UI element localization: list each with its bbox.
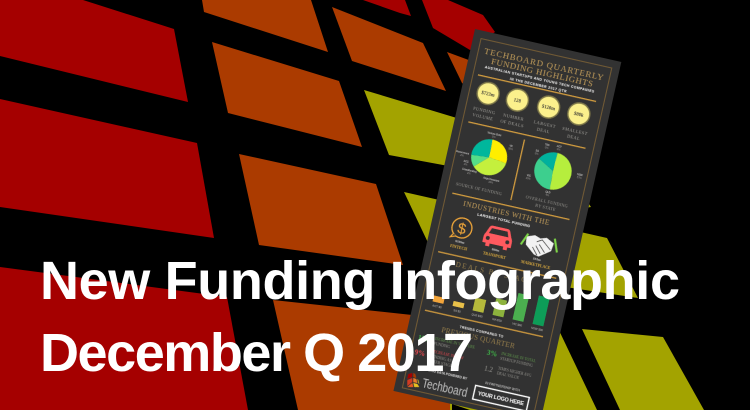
stat: largest deal <box>532 94 562 135</box>
stat: smallest deal: $80k <box>573 112 584 119</box>
trend: new funding: FUNDING AS <box>430 354 452 363</box>
stat: smallest deal <box>560 100 594 143</box>
pie caption: funding by state <box>524 194 568 215</box>
trend: total startup funding: INCREASE IN TOTAL <box>501 352 537 364</box>
industry label: fintech: FINTECH <box>450 244 467 252</box>
industry label: marketplace: $55m <box>533 256 541 262</box>
pie labels: source of funding: Angel Investors <box>483 176 500 183</box>
bar labels: NSW $90 <box>531 326 544 332</box>
title: December Q 2017 <box>40 323 473 383</box>
icon: car <box>482 224 515 251</box>
stat: smallest deal: DEAL <box>567 133 581 141</box>
stat: number of deals: NUMBER <box>503 112 524 122</box>
stat: largest deal: $120m <box>541 105 555 112</box>
pie labels: funding by state: SA <box>535 149 539 153</box>
poster inner border <box>402 39 612 410</box>
stat: funding volume: $723m <box>481 91 495 99</box>
pie labels: funding by state: 0% <box>545 146 549 150</box>
panel: orange grid tiles <box>202 0 485 410</box>
stat: funding volume: VOLUME <box>472 112 494 122</box>
pie labels: funding by state: ACT <box>556 145 562 149</box>
panel: olive grid tiles <box>364 90 704 410</box>
industry label: fintech: $339m <box>455 239 465 245</box>
industry label: fintech <box>450 238 469 252</box>
poster subtitle: IN THE DECEMBER 2017 QTR <box>509 77 567 94</box>
heading: deals by stage: DEALS BY STAGE <box>455 261 533 286</box>
stat: largest deal: LARGEST <box>533 119 556 129</box>
stat: funding volume <box>471 80 502 122</box>
logo placeholder box: YOUR LOGO HERE <box>477 391 525 407</box>
industry label: marketplace: MARKETPLACE <box>521 260 551 270</box>
pie labels: funding by state: 4% <box>545 194 550 197</box>
title <box>40 251 680 383</box>
icon: techboard logo <box>407 373 419 387</box>
divider <box>468 121 586 149</box>
heading: previous quarter: PREVIOUS QUARTER <box>441 325 516 350</box>
pie labels: funding by state: TAS <box>545 143 550 147</box>
pie chart: funding by state <box>534 152 572 190</box>
poster title: TECHBOARD QUARTERLY <box>483 46 605 82</box>
subheading: trends compared to: TRENDS COMPARED TO <box>459 325 504 339</box>
logo text: techboard: Techboard <box>421 376 469 400</box>
pie labels: source of funding: 34% <box>488 181 494 185</box>
poster title: FUNDING HIGHLIGHTS <box>490 56 594 89</box>
bar labels: ACT $0 <box>432 303 443 310</box>
credit: funding data powered by: FUNDING DATA POWERED BY <box>421 367 468 381</box>
trend: total startup funding: STARTUP FUNDING <box>500 357 533 368</box>
pie labels: source of funding: ACC <box>463 160 469 164</box>
credit: in partnership with: IN PARTNERSHIP WITH <box>485 381 521 393</box>
pie labels: funding by state: 30% <box>525 177 532 181</box>
bar labels: QLD $30 <box>471 312 483 319</box>
pie caption: funding by state: BY STATE <box>535 203 556 212</box>
pie chart: source of funding <box>471 139 507 175</box>
industry label: transport <box>482 245 508 260</box>
bar labels <box>432 303 544 332</box>
pie caption: funding by state: OVERALL FUNDING <box>525 194 568 209</box>
trend: venture funding: INCREASE IN VENTURE <box>434 337 476 350</box>
pie labels: source of funding: 2% <box>460 154 465 158</box>
trend: new funding <box>413 346 464 370</box>
poster subtitle: AUSTRALIAN STARTUPS AND YOUNG TECH COMPANIES <box>484 65 595 94</box>
stat: number of deals: OF DEALS <box>500 118 525 129</box>
trend: new funding: 9% <box>414 348 426 358</box>
subheading: largest total funding: LARGEST TOTAL FUNDING <box>477 213 530 228</box>
icon: handshake <box>519 232 560 260</box>
pie labels: source of funding: Government <box>456 150 470 156</box>
logo placeholder box <box>473 385 529 410</box>
pie labels: funding by state: QLD <box>545 191 551 195</box>
divider <box>438 251 556 279</box>
trend: deal value: DEAL VALUE <box>496 371 520 380</box>
pie labels: funding by state: 0% <box>556 148 561 152</box>
icon: dollar speech bubble: $ <box>456 220 468 238</box>
pie labels: funding by state: 0% <box>534 152 539 156</box>
bar labels: SA $0 <box>453 308 462 314</box>
title: New Funding Infographic <box>40 251 680 311</box>
pie labels: funding by state: VIC <box>526 174 531 178</box>
bar labels: WA $30 <box>492 317 503 323</box>
stat: smallest deal: SMALLEST <box>562 126 588 136</box>
pie labels: funding by state: NSW <box>577 173 584 177</box>
poster background <box>393 29 621 410</box>
industry label: transport: $80m <box>491 247 500 253</box>
heading: industries: INDUSTRIES WITH THE <box>462 200 551 227</box>
trend: deal value: 1.2 <box>483 364 494 374</box>
trend: venture funding <box>417 333 476 355</box>
divider <box>478 74 596 102</box>
stat: number of deals <box>500 87 532 129</box>
divider <box>452 193 570 220</box>
stat: largest deal: DEAL <box>536 127 550 134</box>
pie labels: source of funding: 5% <box>492 135 497 139</box>
pie labels: source of funding <box>451 125 516 188</box>
stat: funding volume: FUNDING <box>473 106 496 116</box>
pie labels: source of funding: Crowdfunding <box>462 168 477 174</box>
pie caption: source of funding: SOURCE OF FUNDING <box>455 181 502 196</box>
trend: venture funding: 11% <box>417 334 432 344</box>
trend: total startup funding: 3% <box>486 349 498 359</box>
pie labels: source of funding: VC <box>509 144 513 148</box>
pie labels: source of funding: Venture Debt <box>487 131 502 137</box>
panel: red grid tiles <box>0 0 495 410</box>
bar labels: VIC $90 <box>512 321 523 328</box>
pie labels: source of funding: 35% <box>508 147 514 151</box>
icon: dollar speech bubble <box>450 216 474 241</box>
trend: total startup funding <box>486 349 537 368</box>
trend: venture funding: FUNDING <box>433 342 451 349</box>
stat: number of deals: 128 <box>513 98 522 105</box>
industry label: marketplace <box>521 254 552 270</box>
trend: deal value: TIMES HIGHER AVG <box>498 366 532 378</box>
trend: new funding: DECREASE IN NEW <box>431 349 464 361</box>
trend: new funding: LATER STAGES <box>428 359 455 369</box>
divider <box>425 310 543 337</box>
divider vertical <box>510 139 525 200</box>
industry label: transport: TRANSPORT <box>482 251 506 260</box>
pie labels: funding by state <box>523 140 589 204</box>
panel: tilted infographic poster <box>393 29 621 410</box>
trend: deal value <box>483 363 532 383</box>
pie labels: source of funding: 2% <box>463 163 468 167</box>
pie labels: source of funding: 2% <box>467 172 472 176</box>
bar chart <box>431 273 551 332</box>
pie labels: funding by state: 57% <box>577 176 583 180</box>
black patch under the poster <box>452 404 470 410</box>
